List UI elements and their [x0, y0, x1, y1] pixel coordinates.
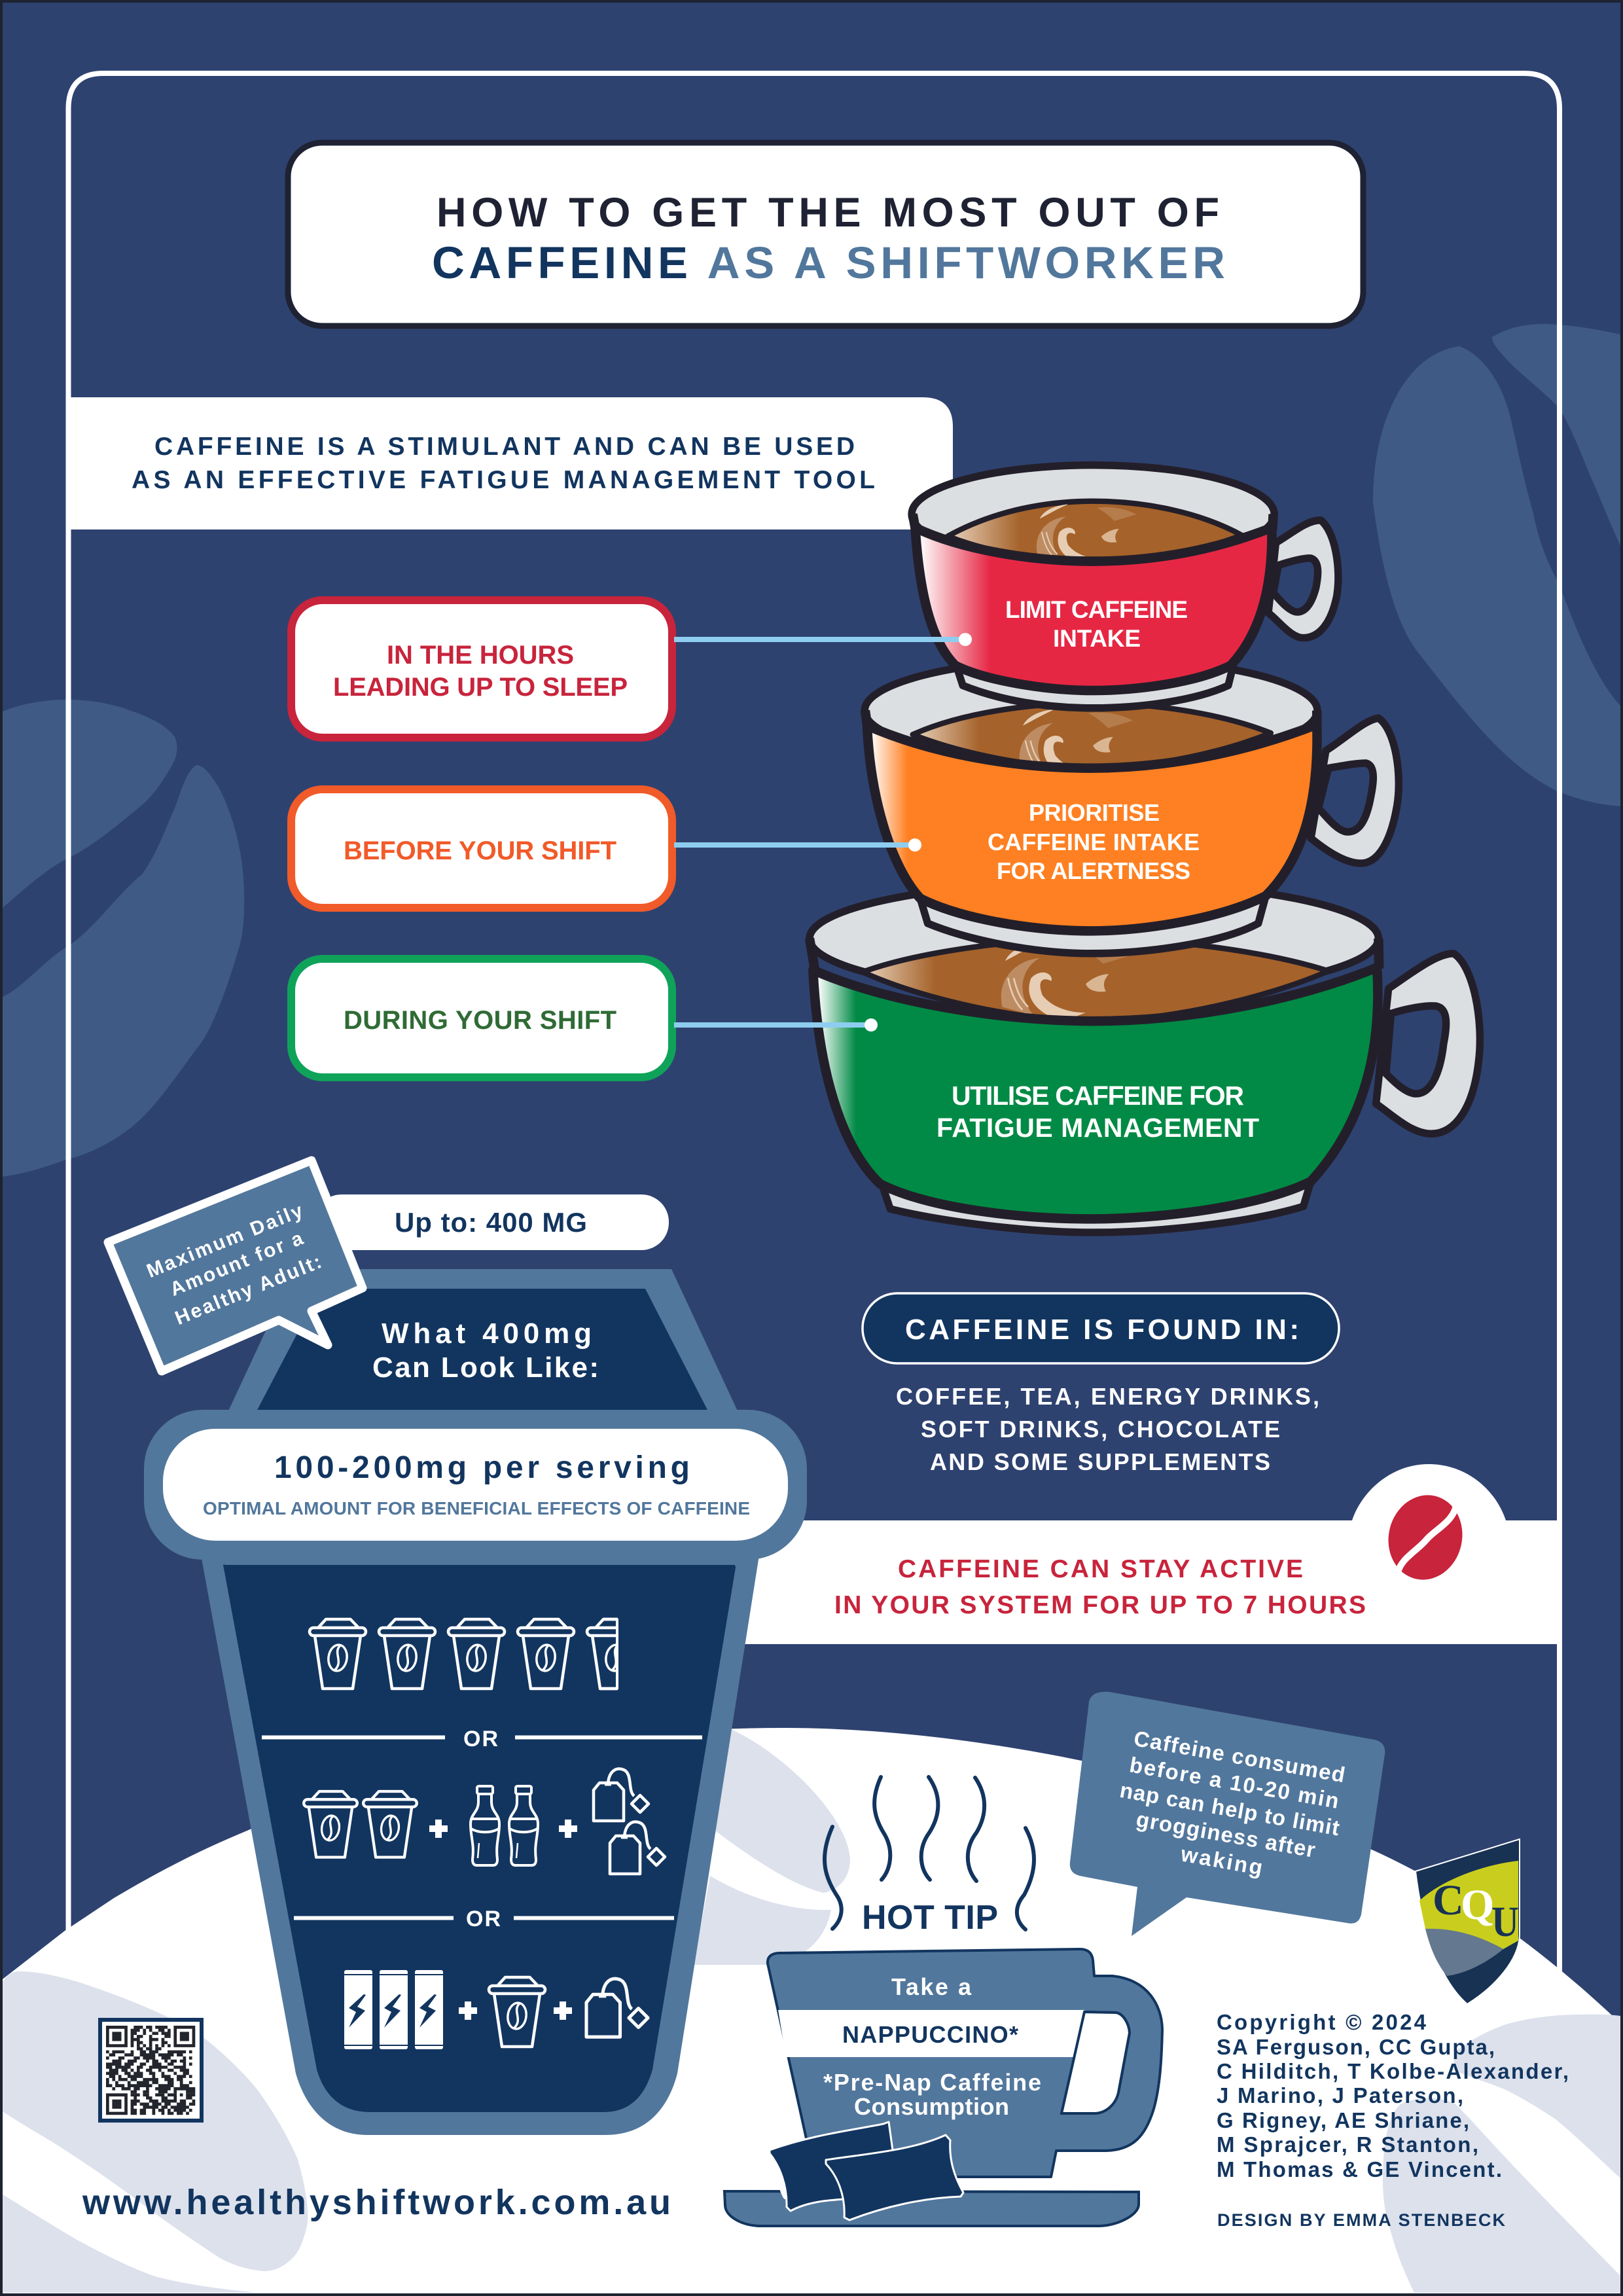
title box — [288, 143, 1363, 326]
label: in the hours leading up to sleep: LEADING UP TO SLEEP — [333, 673, 628, 702]
row 1: five coffee cups — [310, 1619, 643, 1689]
copyright text: J Marino, J Paterson, — [1217, 2083, 1463, 2108]
connector line: orange — [674, 842, 915, 848]
copyright text — [1217, 2010, 1569, 2181]
green cup text — [936, 1081, 1259, 1143]
caffeine sources text: SOFT DRINKS, CHOCOLATE — [921, 1416, 1280, 1443]
mug text: Consumption — [854, 2093, 1009, 2120]
nap speech bubble — [1070, 1692, 1385, 1936]
lid text — [372, 1318, 599, 1384]
up to 400mg pill — [314, 1194, 669, 1250]
design credit: DESIGN BY EMMA STENBECK — [1217, 2210, 1505, 2230]
serving panel — [163, 1429, 788, 1541]
mug text: *Pre-Nap Caffeine — [823, 2069, 1041, 2096]
label: during your shift: DURING YOUR SHIFT — [344, 1006, 616, 1035]
orange cup text: CAFFEINE INTAKE — [988, 829, 1200, 855]
intro text line 2: AS AN EFFECTIVE FATIGUE MANAGEMENT TOOL — [132, 466, 875, 494]
cup lid outer — [227, 1269, 739, 1414]
seven hours text — [834, 1555, 1366, 1619]
connector dot: green — [865, 1018, 878, 1031]
nap speech bubble: waking — [1179, 1841, 1264, 1880]
decorative bean: top right — [1373, 324, 1623, 806]
copyright text: M Thomas & GE Vincent. — [1217, 2157, 1502, 2181]
title line 1: HOW TO GET THE MOST OUT OF — [437, 190, 1219, 236]
serving panel: 100-200mg per serving — [274, 1450, 690, 1485]
maximum daily speech bubble: Amount for a — [167, 1227, 306, 1300]
takeaway cup graphic — [144, 1269, 807, 2135]
shield letters: Q — [1461, 1881, 1494, 1929]
label: in the hours leading up to sleep — [291, 600, 672, 738]
connector dot: red — [959, 633, 972, 646]
nap speech bubble: nap can help to limit — [1118, 1778, 1342, 1840]
title line 2: CAFFEINE AS A SHIFTWORKER — [432, 238, 1225, 288]
cqu shield logo — [1416, 1839, 1520, 2004]
label: during your shift — [291, 959, 672, 1077]
pale bean shapes on hill — [3, 1729, 1620, 2293]
outer white frame — [68, 73, 1560, 1971]
pillow back — [770, 2122, 893, 2211]
mug text: Take a — [891, 1973, 972, 2000]
label: before your shift: BEFORE YOUR SHIFT — [344, 836, 616, 865]
icon: nappuccino mug — [724, 1949, 1162, 2226]
or divider 1: OR — [463, 1727, 498, 1751]
mug text — [823, 1973, 1041, 2120]
icon: red coffee bean — [1380, 1488, 1471, 1587]
mug hole fix — [1061, 2012, 1130, 2113]
shield yellow — [1419, 1861, 1518, 1949]
copyright text: SA Ferguson, CC Gupta, — [1217, 2035, 1495, 2059]
seven hours text: IN YOUR SYSTEM FOR UP TO 7 HOURS — [834, 1591, 1366, 1619]
pillow front — [826, 2135, 963, 2220]
caffeine is found in pill — [863, 1293, 1339, 1363]
stacked cups — [674, 465, 1480, 1232]
nap speech bubble: grogginess after — [1134, 1806, 1317, 1862]
white hours band with bean tab — [720, 1464, 1558, 1644]
copyright text: Copyright © 2024 — [1217, 2010, 1427, 2034]
orange cup text: FOR ALERTNESS — [997, 857, 1190, 884]
connector line: green — [674, 1022, 871, 1028]
mug text: NAPPUCCINO* — [842, 2021, 1018, 2048]
seven hours text: CAFFEINE CAN STAY ACTIVE — [898, 1555, 1303, 1583]
shield letters: C — [1433, 1876, 1464, 1924]
red cup text — [1005, 596, 1188, 652]
hot tip heading: HOT TIP — [862, 1899, 998, 1937]
orange cup text — [988, 799, 1200, 884]
lid text: What 400mg — [382, 1318, 592, 1350]
maximum daily speech bubble: Healthy Adult: — [172, 1251, 325, 1329]
copyright text: G Rigney, AE Shriane, — [1217, 2108, 1469, 2132]
label: before your shift — [291, 789, 672, 908]
intro text line 1: CAFFEINE IS A STIMULANT AND CAN BE USED — [154, 433, 855, 461]
row 3: cans, cup and tea — [344, 1970, 648, 2049]
saucer — [724, 2191, 1139, 2226]
maximum daily speech bubble: Maximum Daily — [144, 1200, 306, 1282]
green cup text: FATIGUE MANAGEMENT — [936, 1113, 1259, 1143]
nap speech bubble: before a 10-20 min — [1128, 1752, 1341, 1813]
shield grey — [1425, 1929, 1503, 1976]
label: in the hours leading up to sleep: IN THE HOURS — [387, 641, 574, 670]
row 2: cups, bottles and tea bags — [304, 1769, 665, 1874]
red cup text: INTAKE — [1053, 625, 1141, 652]
caffeine sources text: COFFEE, TEA, ENERGY DRINKS, — [896, 1383, 1319, 1410]
shield letters — [1433, 1876, 1519, 1946]
nap speech bubble: Caffeine consumed — [1132, 1726, 1347, 1787]
shield letters: U — [1491, 1898, 1519, 1946]
up to 400mg pill: Up to: 400 MG — [395, 1207, 587, 1238]
intro banner — [69, 397, 953, 529]
cup body outer — [200, 1551, 760, 2135]
copyright text: C Hilditch, T Kolbe-Alexander, — [1217, 2059, 1569, 2083]
red cup — [912, 465, 1338, 708]
maximum daily speech bubble — [108, 1160, 363, 1371]
white hill background — [0, 1728, 1623, 2296]
decorative bean: left — [0, 700, 244, 1177]
cup rim — [144, 1410, 807, 1560]
green cup — [810, 882, 1480, 1232]
copyright text: M Sprajcer, R Stanton, — [1217, 2132, 1478, 2157]
website url: www.healthyshiftwork.com.au — [82, 2183, 671, 2222]
icon: steam lines — [825, 1777, 1034, 1929]
caffeine sources text — [896, 1383, 1319, 1475]
cup body inner — [223, 1564, 736, 2112]
serving panel: OPTIMAL AMOUNT FOR BENEFICIAL EFFECTS OF CAFFEINE — [203, 1498, 750, 1518]
orange cup — [865, 658, 1399, 954]
caffeine sources text: AND SOME SUPPLEMENTS — [930, 1448, 1270, 1475]
mug white band — [778, 2010, 1084, 2057]
green cup text: UTILISE CAFFEINE FOR — [952, 1081, 1244, 1111]
orange cup text: PRIORITISE — [1029, 799, 1160, 826]
mug body and handle — [768, 1949, 1162, 2177]
cup lid inner — [255, 1289, 709, 1414]
connector dot: orange — [908, 838, 921, 852]
qr code — [100, 2020, 202, 2121]
connector line: red — [674, 637, 965, 642]
or divider 2: OR — [466, 1907, 501, 1931]
red cup text: LIMIT CAFFEINE — [1005, 596, 1188, 623]
lid text: Can Look Like: — [372, 1352, 599, 1384]
caffeine is found in pill: CAFFEINE IS FOUND IN: — [905, 1314, 1299, 1346]
